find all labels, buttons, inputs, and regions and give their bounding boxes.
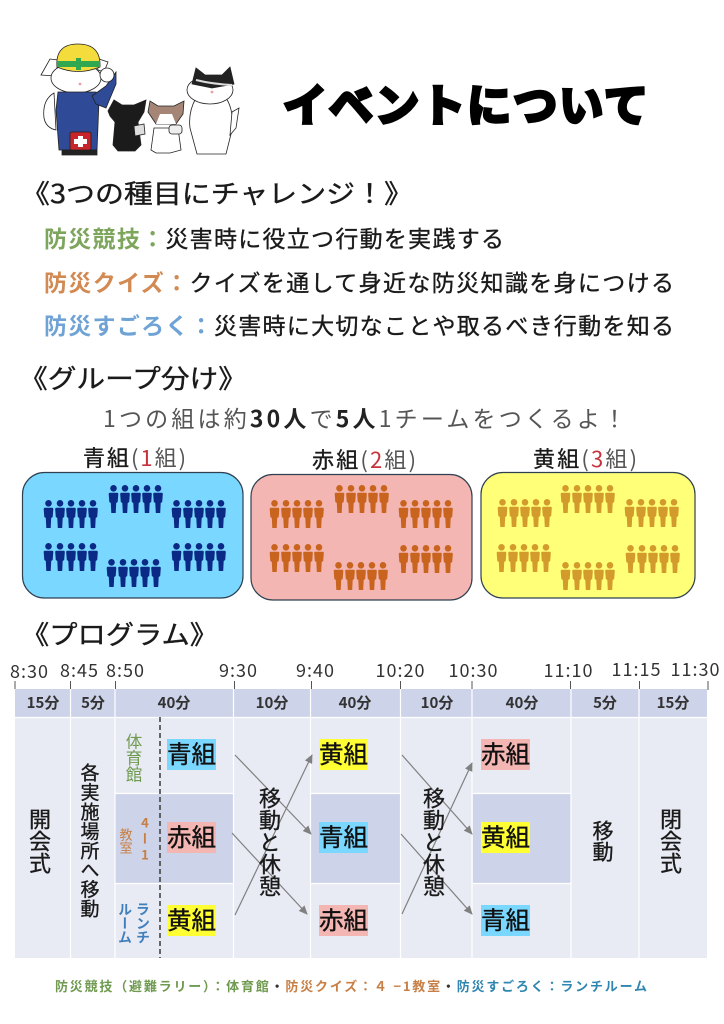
text: disaster skills: 防災競技：災害時に役立つ行動を実践する bbox=[44, 220, 504, 254]
vertical labels: ルーム bbox=[115, 902, 135, 944]
heading: blue group: 青組(1組) bbox=[83, 441, 186, 473]
panel: yellow group bbox=[481, 442, 695, 598]
group tags bbox=[167, 736, 530, 937]
vertical labels bbox=[24, 733, 687, 944]
time axis labels: 8:50 bbox=[106, 657, 144, 683]
vertical labels: 移動と休憩 bbox=[418, 787, 450, 897]
icon: white cat with bandage bbox=[187, 67, 239, 154]
people groups: yellow bbox=[497, 485, 680, 590]
duration headers: 5分 bbox=[593, 692, 617, 713]
time axis labels: 10:20 bbox=[376, 657, 424, 683]
icon: black cat bbox=[108, 100, 146, 151]
people groups: red bbox=[270, 485, 453, 590]
text: disaster quiz: 防災クイズ：クイズを通して身近な防災知識を身につける bbox=[44, 264, 674, 298]
duration headers: 40分 bbox=[339, 692, 371, 713]
vertical labels: 開会式 bbox=[24, 808, 56, 874]
heading: 3 events: 《3つの種目にチャレンジ！》 bbox=[21, 174, 413, 211]
group tags: 赤組 bbox=[319, 902, 368, 937]
vertical labels: 体育館 bbox=[122, 733, 146, 783]
duration headers bbox=[27, 692, 689, 713]
people groups: blue bbox=[44, 485, 226, 587]
group tags: 青組 bbox=[167, 736, 216, 771]
vertical labels: 4ー1 bbox=[136, 816, 154, 864]
vertical labels: 各実施場所へ移動 bbox=[76, 763, 104, 918]
text: disaster sugoroku: 防災すごろく：災害時に大切なことや取るべき行動を知る bbox=[44, 307, 674, 341]
time axis labels: 11:30 bbox=[670, 656, 720, 682]
icon: brown cat bbox=[148, 101, 184, 153]
time axis labels: 8:30 bbox=[10, 658, 48, 684]
duration headers: 10分 bbox=[256, 692, 288, 713]
heading: program: 《プログラム》 bbox=[21, 615, 218, 652]
duration headers: 15分 bbox=[27, 692, 59, 713]
vertical labels: 移動と休憩 bbox=[254, 787, 286, 897]
schedule table bbox=[15, 689, 707, 958]
vertical labels: 教室 bbox=[116, 827, 136, 854]
group tags: 黄組 bbox=[481, 819, 530, 854]
title: イベントについて bbox=[283, 70, 648, 134]
time axis labels bbox=[10, 656, 720, 690]
time axis labels: 9:40 bbox=[296, 657, 334, 683]
time axis labels: 11:15 bbox=[612, 656, 660, 682]
group tags: 青組 bbox=[319, 819, 368, 854]
time axis labels: 10:30 bbox=[448, 657, 498, 683]
group tags: 黄組 bbox=[319, 736, 368, 771]
time axis labels: 9:30 bbox=[219, 657, 257, 683]
footer legend: 防災競技（避難ラリー）：体育館・防災クイズ：４ −1教室・防災すごろく：ランチルーム bbox=[55, 976, 647, 995]
panel: blue group bbox=[22, 441, 243, 598]
vertical labels: 移動 bbox=[588, 820, 618, 862]
heading: grouping: 《グループ分け》 bbox=[19, 359, 247, 396]
illustration: disaster prevention cats bbox=[41, 44, 239, 155]
heading: red group: 赤組(2組) bbox=[312, 443, 416, 475]
group tags: 赤組 bbox=[481, 736, 530, 771]
duration headers: 40分 bbox=[506, 692, 538, 713]
heading: yellow group: 黄組(3組) bbox=[533, 442, 637, 474]
duration headers: 10分 bbox=[421, 692, 453, 713]
group tags: 黄組 bbox=[167, 902, 216, 937]
arrows bbox=[232, 755, 472, 915]
group tags: 青組 bbox=[481, 902, 530, 937]
panel: red group bbox=[251, 443, 472, 600]
time axis labels: 11:10 bbox=[544, 657, 592, 683]
vertical labels: ランチ bbox=[133, 902, 153, 944]
group tags: 赤組 bbox=[167, 819, 216, 854]
text: group description: 1つの組は約30人で5人1チームをつくるよ！ bbox=[103, 400, 626, 434]
duration headers: 5分 bbox=[81, 692, 105, 713]
duration headers: 15分 bbox=[657, 692, 689, 713]
event list bbox=[44, 220, 674, 341]
time axis labels: 8:45 bbox=[60, 657, 98, 683]
vertical labels: 閉会式 bbox=[655, 808, 687, 874]
icon: cat with hard hat bbox=[41, 44, 116, 155]
duration headers: 40分 bbox=[158, 692, 190, 713]
